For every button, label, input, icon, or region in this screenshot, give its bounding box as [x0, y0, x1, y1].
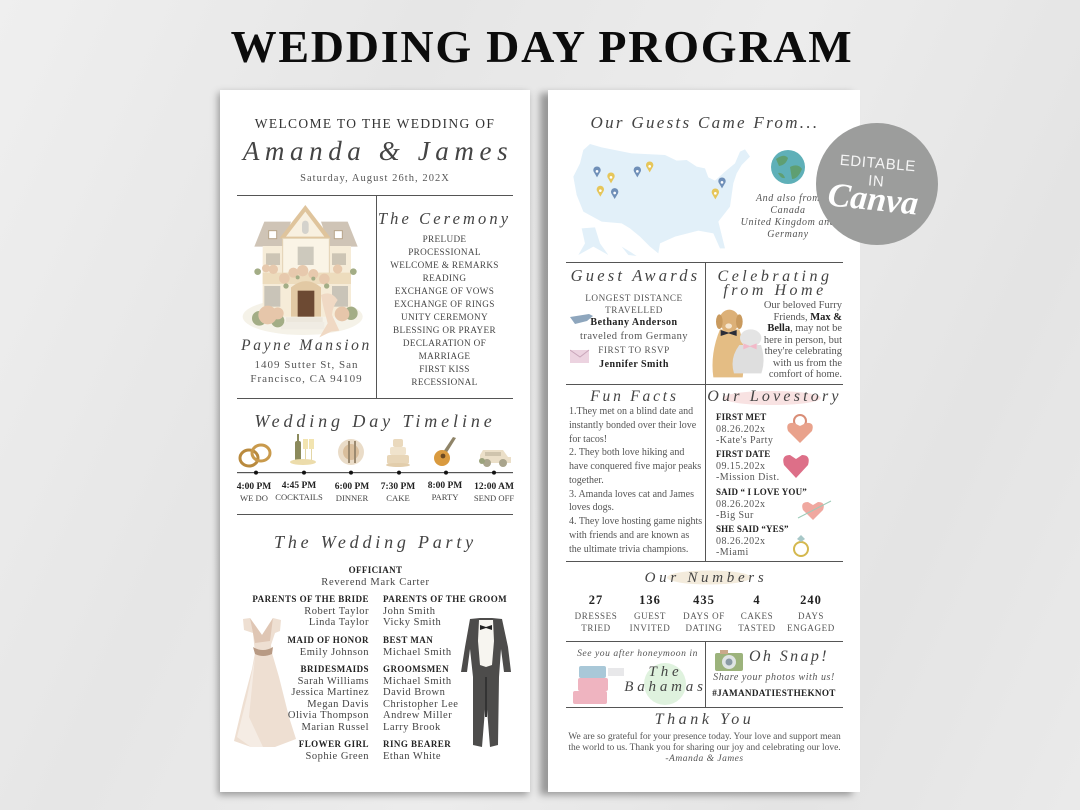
- timeline axis: [237, 470, 513, 475]
- parents of the groom: Vicky Smith: [383, 617, 441, 628]
- stat: days dating: DAYS OF: [683, 611, 725, 621]
- icon: wedding dress: [234, 618, 296, 747]
- ceremony order list: PROCESSIONAL: [408, 246, 481, 256]
- panel: thank you: [566, 708, 843, 768]
- fun facts list: loves dogs.: [569, 502, 614, 513]
- destination: Bahamas: [624, 679, 707, 695]
- fun facts list: 1.They met on a blind date and: [569, 406, 693, 417]
- first met: -Kate's Party: [716, 435, 773, 446]
- ceremony order list: PRELUDE: [423, 234, 466, 244]
- bridesmaids: Megan Davis: [307, 698, 369, 710]
- icon: heart lock: [782, 414, 816, 444]
- said i love you: -Big Sur: [716, 510, 754, 521]
- heading: Fun Facts: [590, 388, 679, 405]
- parents of the bride: PARENTS OF THE BRIDE: [252, 594, 369, 604]
- icon: plane: [569, 313, 593, 325]
- stat: days dating: DATING: [685, 622, 723, 632]
- longest distance award: LONGEST DISTANCE: [585, 293, 683, 303]
- share text: Share your photos with us!: [713, 672, 835, 683]
- ring bearer: RING BEARER: [383, 739, 451, 749]
- panel: left program card: [220, 90, 530, 792]
- ceremony order list: WELCOME & REMARKS: [390, 260, 499, 270]
- flower girl: [298, 739, 369, 762]
- 6:00 PM: DINNER: [336, 492, 368, 502]
- officiant: OFFICIANT: [349, 565, 402, 575]
- officiant: Reverend Mark Carter: [321, 576, 430, 588]
- badge text: editable in: [815, 150, 939, 196]
- panel: right program card: [548, 90, 860, 792]
- 4:45 PM: 4:45 PM: [282, 481, 316, 491]
- parents of the groom: PARENTS OF THE GROOM: [383, 594, 507, 604]
- maid of honor: [287, 635, 369, 658]
- bridesmaids: Marian Russel: [302, 722, 369, 732]
- groomsmen: Christopher Lee: [383, 698, 458, 710]
- panel: fun facts: [566, 385, 705, 561]
- panel: ceremony: [378, 209, 511, 386]
- 8:00 PM: PARTY: [432, 492, 458, 502]
- venue name: Payne Mansion: [241, 337, 372, 354]
- first date: 09.15.202x: [716, 461, 766, 472]
- panel: our numbers: [566, 565, 843, 641]
- first date: -Mission Dist.: [716, 472, 780, 483]
- first date: FIRST DATE: [716, 449, 770, 459]
- parents of the groom: [383, 594, 507, 628]
- fun facts list: instantly bonded over their love: [569, 420, 696, 431]
- fun facts list: [569, 405, 705, 557]
- ring bearer: [383, 739, 451, 762]
- destination: The: [649, 664, 682, 680]
- maid of honor: MAID OF HONOR: [287, 635, 369, 645]
- 6:00 PM: [335, 482, 369, 502]
- she said yes: 08.26.202x: [716, 536, 766, 547]
- ceremony order list: DECLARATION OF: [403, 338, 486, 348]
- 7:30 PM: [381, 482, 415, 502]
- header: [241, 116, 513, 184]
- heading: The Wedding Party: [274, 532, 477, 552]
- caption: See you after honeymoon in: [577, 648, 698, 659]
- icon: guitar: [434, 437, 456, 466]
- fun facts list: the ultimate trivia champions.: [569, 544, 688, 554]
- ceremony order list: EXCHANGE OF VOWS: [395, 286, 494, 296]
- longest distance award: TRAVELLED: [605, 305, 663, 315]
- venue address: Francisco, CA 94109: [250, 373, 363, 385]
- first date: [716, 449, 816, 485]
- thank you message: the world to us. Thank you for sharing our joy and celebrating our love.: [568, 743, 841, 753]
- heading: Celebrating: [718, 268, 832, 285]
- brush highlight: [666, 570, 753, 585]
- icon: champagne: [290, 434, 316, 465]
- also from text: And also from: [756, 193, 820, 204]
- stat: guests: 136: [639, 593, 661, 607]
- icon: ring: [792, 534, 810, 558]
- groomsmen: Michael Smith: [383, 676, 452, 686]
- bridesmaids: [288, 664, 369, 732]
- pets message: Friends, Max &: [773, 312, 842, 322]
- ceremony order list: READING: [423, 272, 466, 282]
- icon: tuxedo: [461, 618, 511, 747]
- groomsmen: [383, 664, 458, 732]
- hashtag: #JAMANDATIESTHEKNOT: [712, 688, 836, 698]
- 4:45 PM: COCKTAILS: [275, 492, 323, 502]
- heading: Our Guests Came From...: [591, 113, 819, 132]
- map of the USA with pins: [574, 144, 750, 256]
- panel: guest awards: [570, 266, 700, 370]
- also from text: United Kingdom and: [741, 217, 835, 228]
- bridesmaids: Olivia Thompson: [288, 710, 369, 721]
- flower girl: FLOWER GIRL: [299, 739, 369, 749]
- 12:00 AM: [474, 482, 514, 502]
- longest distance award: [566, 292, 702, 342]
- fun facts list: 2. They both love hiking and: [569, 447, 684, 458]
- parents of the bride: [252, 594, 369, 628]
- best man: Michael Smith: [383, 646, 452, 658]
- groomsmen: GROOMSMEN: [383, 664, 449, 674]
- parents of the groom: John Smith: [383, 606, 436, 616]
- pets message: they're celebrating: [765, 346, 842, 357]
- panel: celebrating from home: [706, 263, 843, 384]
- pets message: comfort of home.: [769, 369, 842, 380]
- fun facts list: 3. Amanda loves cat and James: [569, 488, 694, 500]
- stat: days dating: 435: [693, 593, 715, 607]
- heading: Guest Awards: [571, 266, 700, 285]
- fun facts list: with friends and are known as: [569, 530, 689, 541]
- ceremony order list: FIRST KISS: [419, 364, 470, 374]
- stat: dresses: [566, 593, 626, 637]
- fun facts list: have conquered five major peaks: [569, 461, 701, 472]
- 8:00 PM: [428, 481, 462, 502]
- best man: [383, 635, 452, 658]
- couple names: Amanda & James: [243, 136, 513, 166]
- panel: honeymoon: [566, 642, 705, 707]
- icon: cake: [386, 439, 410, 467]
- heading: Thank You: [655, 711, 754, 728]
- officiant: [321, 565, 430, 588]
- ceremony order list: MARRIAGE: [419, 350, 470, 360]
- title: WEDDING DAY PROGRAM: [231, 21, 853, 72]
- 7:30 PM: 7:30 PM: [381, 482, 415, 492]
- first met: 08.26.202x: [716, 424, 766, 435]
- longest distance award: Bethany Anderson: [590, 317, 678, 328]
- best man: BEST MAN: [383, 635, 433, 645]
- pets message: [706, 300, 842, 382]
- groomsmen: Larry Brook: [383, 722, 441, 732]
- stat: cakes: [727, 593, 787, 637]
- heading: Our Lovestory: [707, 388, 842, 405]
- flower girl: Sophie Green: [306, 750, 369, 762]
- icon: rings: [238, 444, 272, 468]
- badge: editable in Canva: [816, 123, 938, 245]
- panel: venue: [241, 205, 372, 385]
- parents of the bride: Robert Taylor: [304, 606, 369, 616]
- icon: heart with arrow: [797, 498, 833, 522]
- date: Saturday, August 26th, 202X: [300, 173, 450, 184]
- first met: [716, 412, 816, 448]
- first to rsvp award: Jennifer Smith: [599, 359, 669, 370]
- right column: groom side: [383, 594, 507, 762]
- pets message: here in person, but: [764, 334, 842, 346]
- ceremony order list: RECESSIONAL: [411, 376, 478, 386]
- 4:00 PM: WE DO: [240, 492, 268, 502]
- parents of the bride: Linda Taylor: [309, 617, 369, 628]
- destination: [623, 665, 708, 695]
- ceremony order list: [390, 234, 499, 386]
- 12:00 AM: SEND OFF: [474, 492, 514, 502]
- thank you message: [566, 732, 843, 766]
- stat: guests: GUEST: [634, 611, 666, 621]
- groomsmen: David Brown: [383, 687, 445, 698]
- said i love you: [716, 487, 816, 523]
- icon: car: [479, 450, 511, 467]
- fun facts list: for tacos!: [569, 434, 607, 444]
- panel: wedding party: [234, 532, 511, 762]
- stat: dresses: 27: [589, 593, 603, 607]
- first to rsvp award: [566, 343, 702, 373]
- stat: days dating: [674, 593, 734, 637]
- icon: globe: [771, 150, 805, 184]
- pets message: with us from the: [773, 358, 842, 368]
- also from text: [741, 193, 835, 240]
- heading: The Ceremony: [378, 209, 511, 228]
- stat: days engaged: 240: [800, 593, 822, 607]
- thank you message: -Amanda & James: [665, 754, 744, 764]
- said i love you: 08.26.202x: [716, 499, 766, 510]
- also from text: Germany: [767, 229, 809, 240]
- first met: FIRST MET: [716, 412, 766, 422]
- thank you message: We are so grateful for your presence today. Your love and support mean: [568, 732, 841, 742]
- she said yes: SHE SAID “YES”: [716, 524, 789, 534]
- icon: suitcases: [572, 666, 626, 704]
- icon: watercolor house: [242, 205, 363, 338]
- 4:00 PM: 4:00 PM: [237, 482, 271, 492]
- venue address: [250, 359, 363, 385]
- icon: envelope: [570, 349, 590, 364]
- stat: cakes: CAKES: [741, 611, 773, 621]
- ceremony order list: UNITY CEREMONY: [401, 312, 488, 322]
- 12:00 AM: 12:00 AM: [474, 482, 514, 492]
- ceremony order list: EXCHANGE OF RINGS: [394, 298, 495, 308]
- maid of honor: Emily Johnson: [300, 646, 369, 658]
- icon: green brush circle: [644, 663, 686, 705]
- 4:00 PM: [236, 482, 271, 502]
- panel: guests map: [574, 113, 835, 256]
- also from text: Canada: [770, 205, 806, 216]
- panel: timeline: [236, 411, 514, 515]
- first to rsvp award: FIRST TO RSVP: [598, 345, 670, 355]
- badge text: editable in: IN: [867, 172, 885, 191]
- she said yes: [716, 524, 816, 560]
- 8:00 PM: 8:00 PM: [428, 481, 462, 491]
- ring bearer: Ethan White: [383, 750, 441, 762]
- 4:45 PM: [275, 481, 323, 502]
- bridesmaids: Sarah Williams: [298, 676, 369, 686]
- icon: dog and cat: [706, 300, 776, 380]
- heading: [708, 270, 842, 303]
- stat: days engaged: [781, 593, 841, 637]
- 7:30 PM: CAKE: [386, 492, 410, 502]
- stat: cakes: TASTED: [738, 622, 776, 632]
- panel: love story: [706, 385, 843, 561]
- stat: cakes: 4: [753, 593, 761, 607]
- badge text: Canva: Canva: [826, 176, 920, 223]
- stat: dresses: TRIED: [581, 622, 611, 632]
- stat: guests: [620, 593, 680, 637]
- icon: dinner plate: [338, 439, 364, 465]
- fun facts list: 4. They love hosting game nights: [569, 516, 702, 527]
- timeline labels: [236, 481, 514, 502]
- stat: days engaged: ENGAGED: [787, 622, 835, 632]
- stat: days engaged: DAYS: [798, 611, 824, 621]
- heading: Oh Snap!: [749, 648, 829, 665]
- welcome line: WELCOME TO THE WEDDING OF: [255, 116, 495, 131]
- panel: oh snap: [706, 642, 843, 707]
- venue address: 1409 Sutter St, San: [255, 359, 358, 371]
- she said yes: -Miami: [716, 547, 749, 558]
- heading: Wedding Day Timeline: [254, 411, 496, 431]
- bridesmaids: BRIDESMAIDS: [301, 664, 369, 674]
- pets message: Our beloved Furry: [764, 300, 842, 311]
- stat: guests: INVITED: [630, 622, 670, 632]
- bridesmaids: Jessica Martinez: [291, 687, 369, 698]
- said i love you: SAID “ I LOVE YOU”: [716, 487, 807, 497]
- badge text: editable in: EDITABLE: [839, 152, 917, 175]
- icon: floral heart: [782, 453, 810, 479]
- longest distance award: traveled from Germany: [580, 331, 688, 342]
- heading: Our Numbers: [645, 570, 767, 586]
- heading: from Home: [723, 282, 827, 298]
- stat: dresses: DRESSES: [575, 611, 617, 621]
- left column: bride side: [252, 594, 369, 762]
- pets message: Bella, may not be: [767, 323, 842, 334]
- icon: camera: [714, 650, 744, 671]
- groomsmen: Andrew Miller: [383, 710, 452, 721]
- ceremony order list: BLESSING OR PRAYER: [393, 324, 496, 334]
- fun facts list: together.: [569, 475, 604, 486]
- brush highlight: [722, 390, 822, 406]
- 6:00 PM: 6:00 PM: [335, 482, 369, 492]
